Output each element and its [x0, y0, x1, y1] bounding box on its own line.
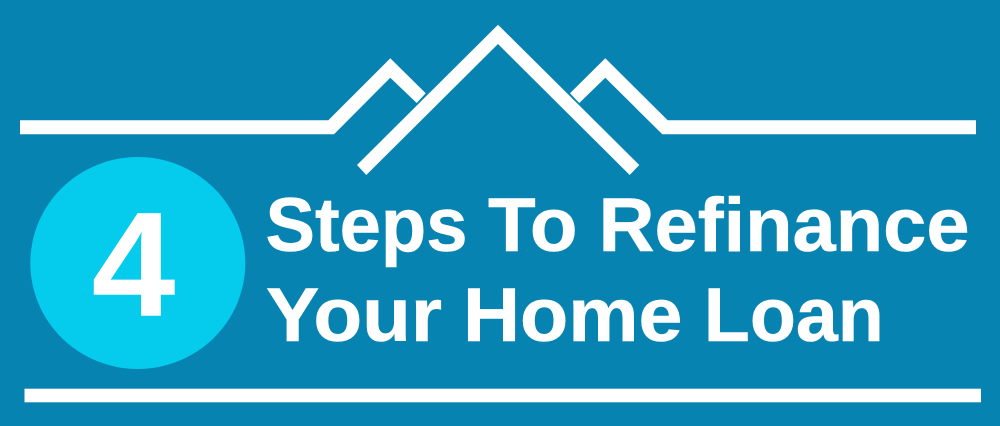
- left roof and horizontal line: [20, 58, 426, 134]
- title line 1: Steps: [266, 183, 468, 268]
- title line 2: Loan: [704, 273, 884, 358]
- title line 1: Refinance: [598, 183, 970, 268]
- title line 2: [266, 273, 884, 358]
- bottom rule: [24, 389, 981, 402]
- number 4: 4: [92, 181, 176, 348]
- title line 2: Your: [266, 273, 442, 358]
- title line 1: To: [488, 183, 578, 268]
- title line 1: [266, 183, 970, 268]
- main center roof: [357, 25, 639, 175]
- icon: house roofline skyline: [20, 25, 976, 175]
- number badge: [30, 157, 245, 369]
- right roof and horizontal line: [570, 58, 976, 134]
- title: [266, 183, 970, 358]
- title line 2: Home: [463, 273, 682, 358]
